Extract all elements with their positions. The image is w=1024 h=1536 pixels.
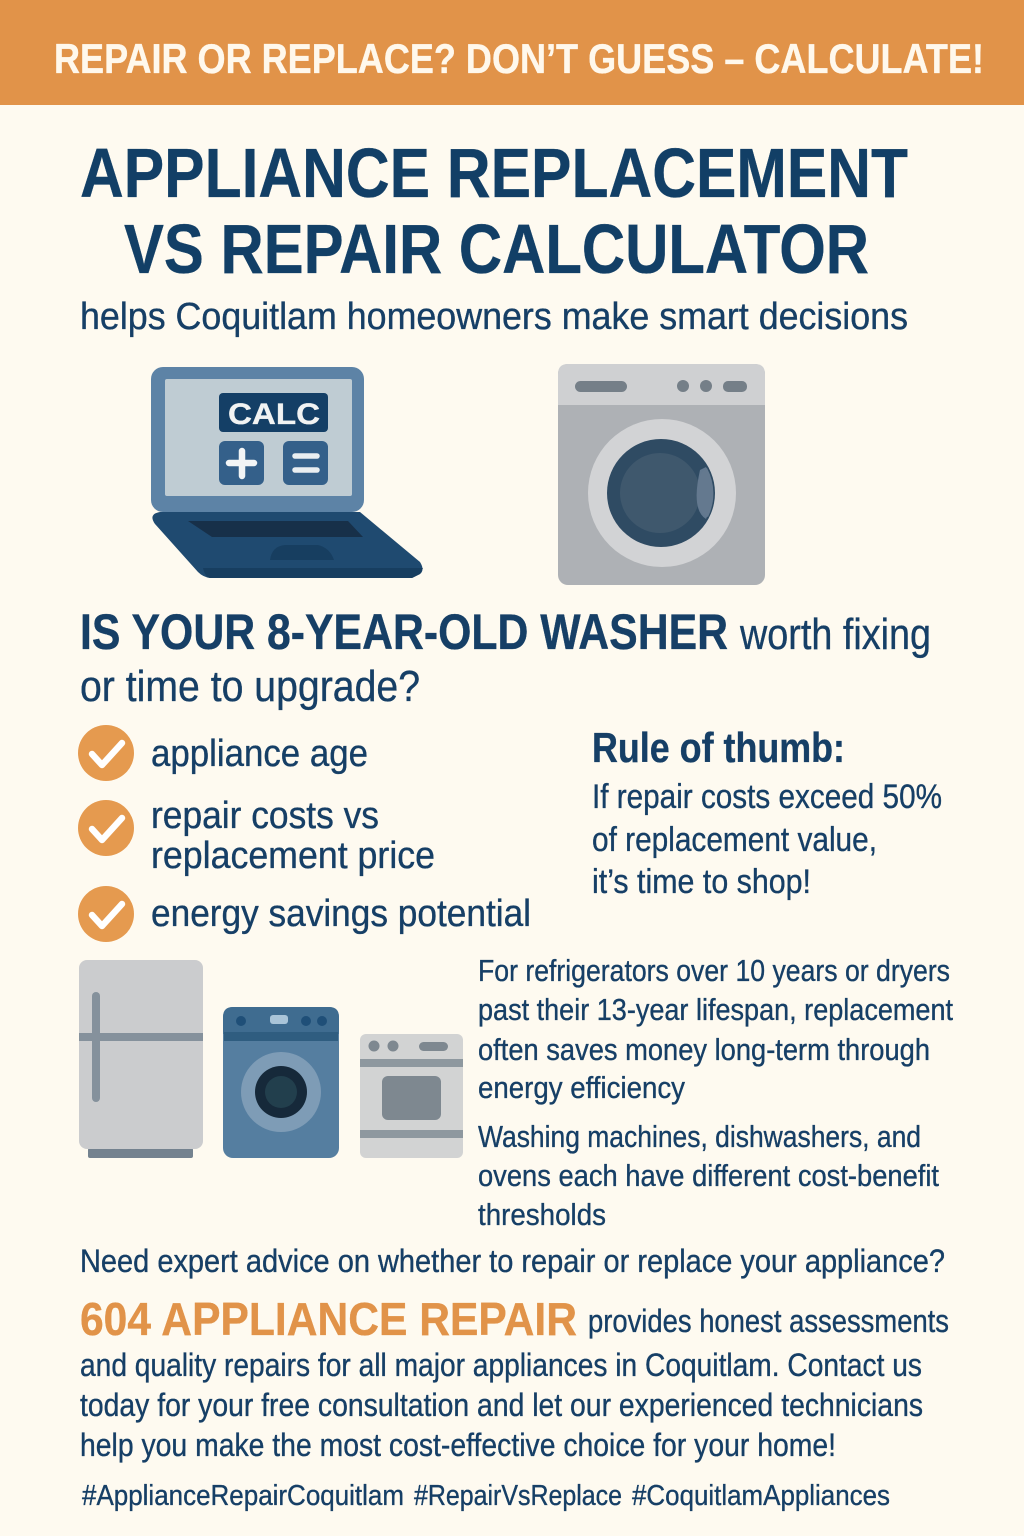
icon: refrigerator [79, 960, 203, 1158]
company block: help you make the most cost-effective choice for your home! [80, 1427, 836, 1463]
question heading: or time to upgrade? [80, 662, 420, 711]
icon: laptop calculator: CALC [228, 398, 320, 431]
cost-benefit text: Washing machines, dishwashers, and [478, 1119, 921, 1154]
hashtags: #ApplianceRepairCoquitlam [82, 1480, 404, 1512]
title: VS REPAIR CALCULATOR [124, 210, 869, 288]
subtitle: helps Coquitlam homeowners make smart decisions [80, 296, 908, 338]
company block: provides honest assessments [588, 1303, 949, 1339]
cost-benefit text: ovens each have different cost-benefit [478, 1158, 939, 1193]
company block: 604 APPLIANCE REPAIR [80, 1293, 577, 1345]
hashtags [82, 1480, 890, 1512]
check item: appliance age: appliance age [151, 733, 368, 775]
refrigerators and dryers text: often saves money long-term through [478, 1032, 930, 1067]
check item: repair costs: repair costs vs [151, 795, 379, 837]
title: APPLIANCE REPLACEMENT [80, 134, 908, 212]
question heading: worth fixing [739, 610, 931, 659]
rule of thumb: Rule of thumb: [592, 724, 845, 771]
rule of thumb: of replacement value, [592, 821, 877, 859]
rule of thumb [592, 724, 942, 901]
check item: appliance age [78, 725, 368, 781]
company block: and quality repairs for all major appliances in Coquitlam. Contact us [80, 1347, 922, 1383]
company block: today for your free consultation and let our experienced technicians [80, 1387, 923, 1423]
icon: small washer [223, 1007, 339, 1158]
check item: repair costs [78, 795, 435, 877]
icon: oven [360, 1034, 463, 1158]
icon: laptop calculator [151, 367, 423, 578]
hashtags: #CoquitlamAppliances [632, 1480, 890, 1512]
call to action question: Need expert advice on whether to repair or replace your appliance? [80, 1243, 945, 1279]
icon: washer [558, 364, 765, 585]
question heading: IS YOUR 8-YEAR-OLD WASHER [80, 604, 728, 660]
cost-benefit text [478, 1119, 939, 1232]
check item: energy savings [78, 886, 531, 942]
refrigerators and dryers text: energy efficiency [478, 1070, 685, 1105]
title [80, 134, 908, 288]
company block [80, 1293, 949, 1463]
banner [0, 0, 1024, 105]
checklist [78, 725, 531, 942]
question heading [80, 604, 931, 711]
refrigerators and dryers text [478, 953, 953, 1105]
rule of thumb: If repair costs exceed 50% [592, 778, 942, 816]
hashtags: #RepairVsReplace [414, 1480, 622, 1512]
check item: repair costs: replacement price [151, 835, 435, 877]
refrigerators and dryers text: For refrigerators over 10 years or dryers [478, 953, 950, 988]
cost-benefit text: thresholds [478, 1197, 606, 1232]
refrigerators and dryers text: past their 13-year lifespan, replacement [478, 992, 953, 1027]
rule of thumb: it’s time to shop! [592, 863, 811, 901]
check item: energy savings: energy savings potential [151, 893, 531, 935]
